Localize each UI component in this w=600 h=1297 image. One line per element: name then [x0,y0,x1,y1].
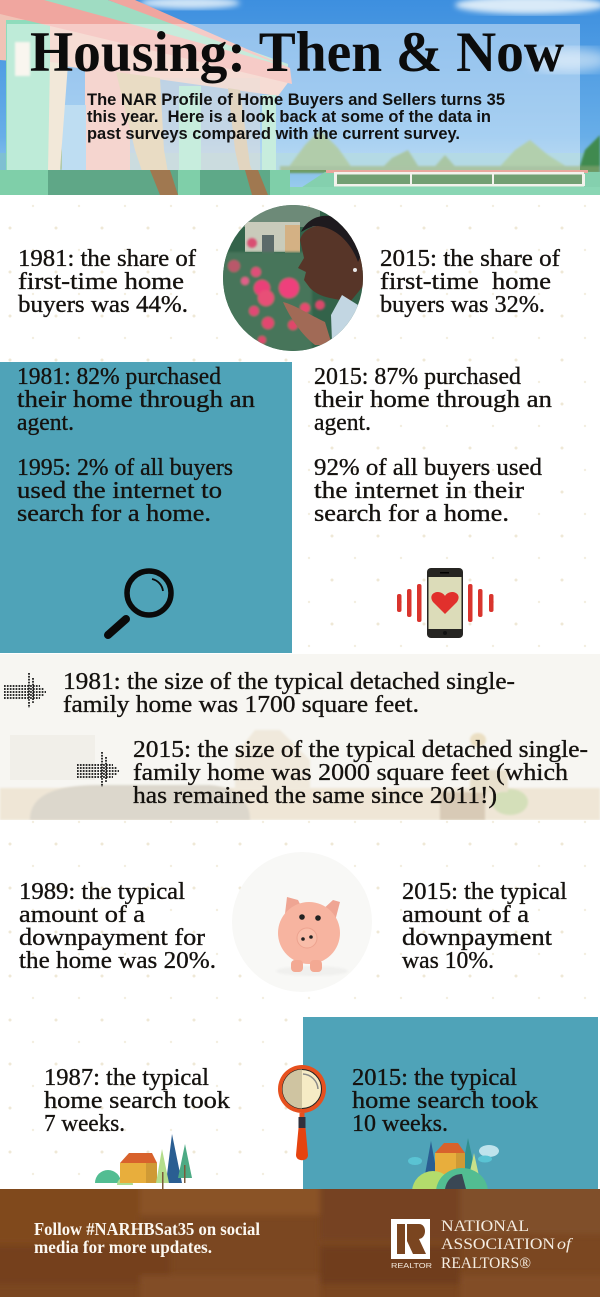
lower mint wall [0,170,290,195]
text: home search 1987: 1987: the typical [44,1065,209,1091]
text: downpayment 2015 [402,879,567,974]
text: social follow: Follow #NARHBSat35 on social [34,1219,260,1239]
text: agent 1981: agent. [17,410,74,436]
panel: white agent and internet 2015 [314,364,552,638]
terrace [302,172,600,187]
text: 1981 first-time buyers: first-time home [18,269,184,295]
lantern [15,42,30,76]
text: 1981 first-time buyers: buyers was 44%. [18,292,188,318]
icon: orange magnifier [278,1065,326,1160]
text: social follow: media for more updates. [34,1237,212,1257]
text: downpayment 2015: amount of a [402,902,529,928]
roof fascia [0,0,292,84]
text: downpayment 1989: amount of a [19,902,145,928]
text: agent 1981: 1995: 2% of all buyers [17,455,233,481]
columns [6,20,50,175]
text: 2015 first-time buyers: first-time home [380,269,551,295]
title: Housing: Then & Now [30,21,564,84]
sofa [30,785,250,820]
icon: dotted arrow 2015 [77,752,119,787]
text: home size 1981: 1981: the size of the typical detached single- [63,669,515,695]
text: downpayment 1989: 1989: the typical [19,879,185,905]
logo: association name: NATIONAL [441,1218,529,1235]
text: agent 2015: 92% of all buyers used [314,455,542,481]
text: downpayment 2015: 2015: the typical [402,879,567,905]
text: agent 1981 [17,364,255,527]
text: home search 2015: home search took [352,1088,538,1114]
toy house [235,730,310,790]
logo: realtor R block [391,1219,433,1270]
logo: realtor R block: REALTOR [391,1261,433,1270]
curtains [48,62,68,170]
text: downpayment 2015: was 10%. [402,948,494,974]
photo: woman smelling flowers [223,205,363,351]
dotted page background [0,195,600,1195]
logo: association name [441,1218,574,1272]
text: agent 2015 [314,364,552,527]
text: agent 1981: 1981: 82% purchased [17,364,221,390]
logo: association name: ASSOCIATION [441,1236,555,1253]
text: agent 2015: the internet in their [314,478,524,504]
text: agent 1981: search for a home. [17,501,211,527]
header photo banner [0,0,600,195]
text: 2015 first-time buyers: buyers was 32%. [380,292,545,318]
text: agent 2015: 2015: 87% purchased [314,364,521,390]
text: 1981 first-time buyers [18,246,196,318]
photo: piggy bank [232,852,372,992]
head [298,225,364,302]
text: social follow [34,1219,260,1257]
text: home size 2015: family home was 2000 square feet (which [133,760,568,786]
translucent panel [7,24,580,170]
intro text: The NAR Profile of Home Buyers and Sellers turns 35 [87,91,505,109]
building mint upper [44,0,288,67]
logo: association name: of [557,1236,574,1253]
text: home size 1981 [63,669,515,718]
text: downpayment 1989: the home was 20%. [19,948,216,974]
footer wood band [0,1180,600,1297]
icon: house and trees left [95,1134,192,1189]
intro text: this year. Here is a look back at some of the data in [87,108,491,126]
icon: phone with heart [397,568,494,638]
logo: association name: REALTORS® [441,1255,531,1272]
intro text [87,91,505,143]
text: downpayment 2015: downpayment [402,925,552,951]
text: home search 2015: 10 weeks. [352,1111,448,1137]
text: home search 1987: home search took [44,1088,230,1114]
intro text: past surveys compared with the current survey. [87,125,460,143]
text: home size 2015 [133,737,588,809]
icon: house and trees right [408,1138,499,1189]
panel: teal agent and internet 1981 [0,362,292,653]
text: home size 1981: family home was 1700 square feet. [63,692,419,718]
text: home search 1987 [44,1065,230,1137]
panel: home size band with room photo [0,654,600,820]
text: agent 2015: their home through an [314,387,552,413]
panel: home search [44,1017,598,1189]
text: agent 1981: used the internet to [17,478,222,504]
palms [52,130,600,173]
soffit [0,10,290,96]
text: agent 2015: agent. [314,410,371,436]
text: downpayment 1989: downpayment for [19,925,205,951]
text: home search 1987: 7 weeks. [44,1111,125,1137]
text: home search 2015: 2015: the typical [352,1065,517,1091]
icon: dotted arrow 1981 [4,673,46,708]
text: agent 1981: their home through an [17,387,255,413]
text: agent 2015: search for a home. [314,501,509,527]
text: home size 2015: 2015: the size of the typical detached single- [133,737,588,763]
text: home size 2015: has remained the same since 2011!) [133,783,497,809]
pink wall [85,66,130,176]
text: 2015 first-time buyers: 2015: the share of [380,246,560,272]
text: downpayment 1989 [19,879,216,974]
text: 1981 first-time buyers: 1981: the share of [18,246,196,272]
hand and shirt [283,302,332,345]
text: 2015 first-time buyers [380,246,560,318]
sea [0,153,600,173]
text: home search 2015 [352,1065,538,1137]
icon: magnifying glass [108,571,171,635]
